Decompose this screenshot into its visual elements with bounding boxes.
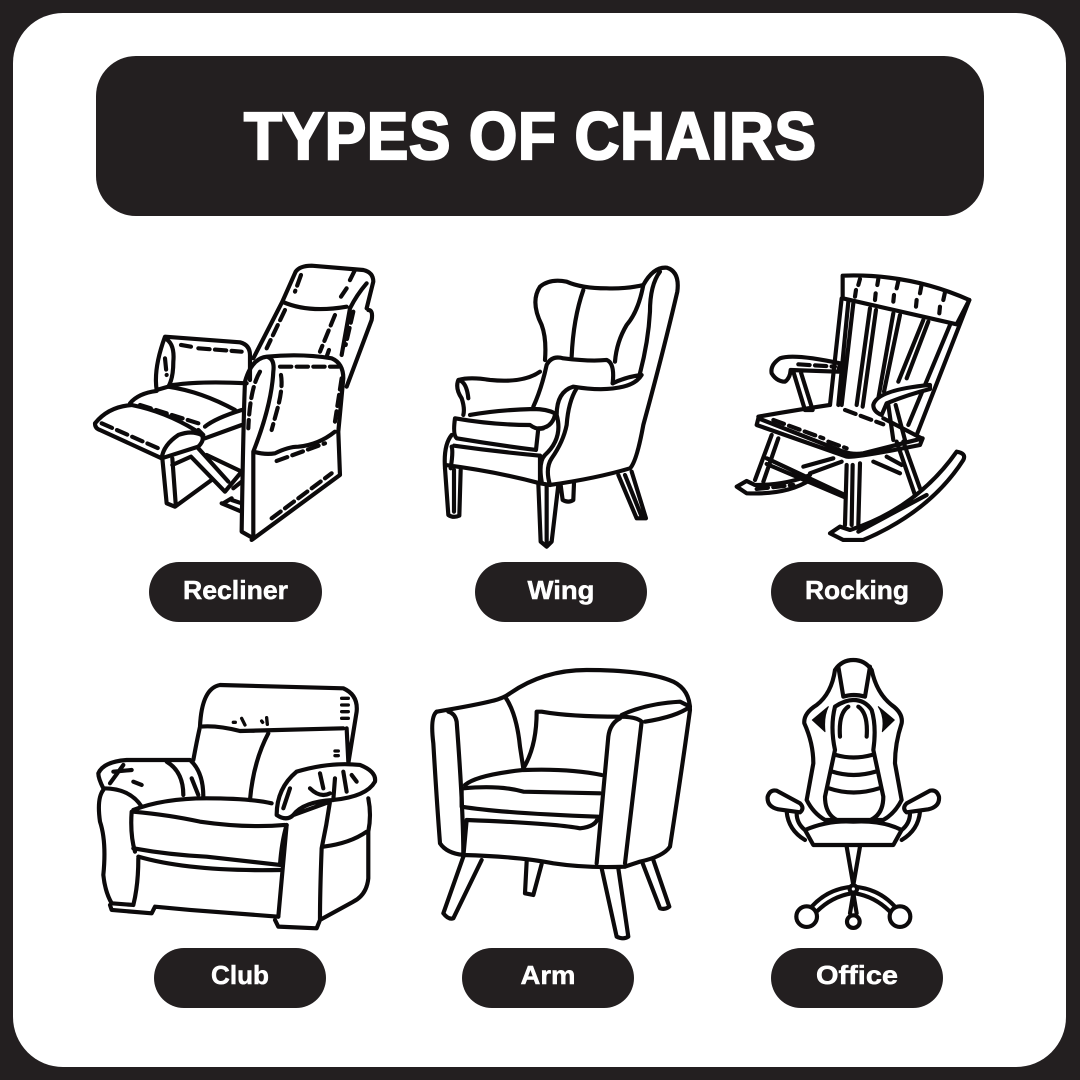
label: Wing — [475, 562, 647, 622]
icon: wing chair — [445, 268, 678, 547]
label: Recliner — [149, 562, 322, 622]
icon: rocking chair — [737, 275, 969, 540]
label: Office: Office — [816, 960, 898, 990]
title banner — [96, 56, 984, 216]
label: Wing: Wing — [528, 575, 594, 605]
icon: recliner chair — [95, 266, 373, 540]
label: Arm: Arm — [520, 960, 576, 990]
label: Rocking: Rocking — [805, 575, 909, 605]
icon: arm chair — [432, 670, 690, 938]
label: Arm — [462, 948, 634, 1008]
label: Club — [154, 948, 326, 1008]
label: Recliner: Recliner — [183, 575, 288, 605]
label: Office — [771, 948, 943, 1008]
title banner: TYPES OF CHAIRS — [244, 99, 816, 173]
label: Club: Club — [211, 960, 269, 990]
icon: office chair — [768, 660, 939, 928]
icon: club chair — [98, 685, 375, 928]
label: Rocking — [771, 562, 943, 622]
